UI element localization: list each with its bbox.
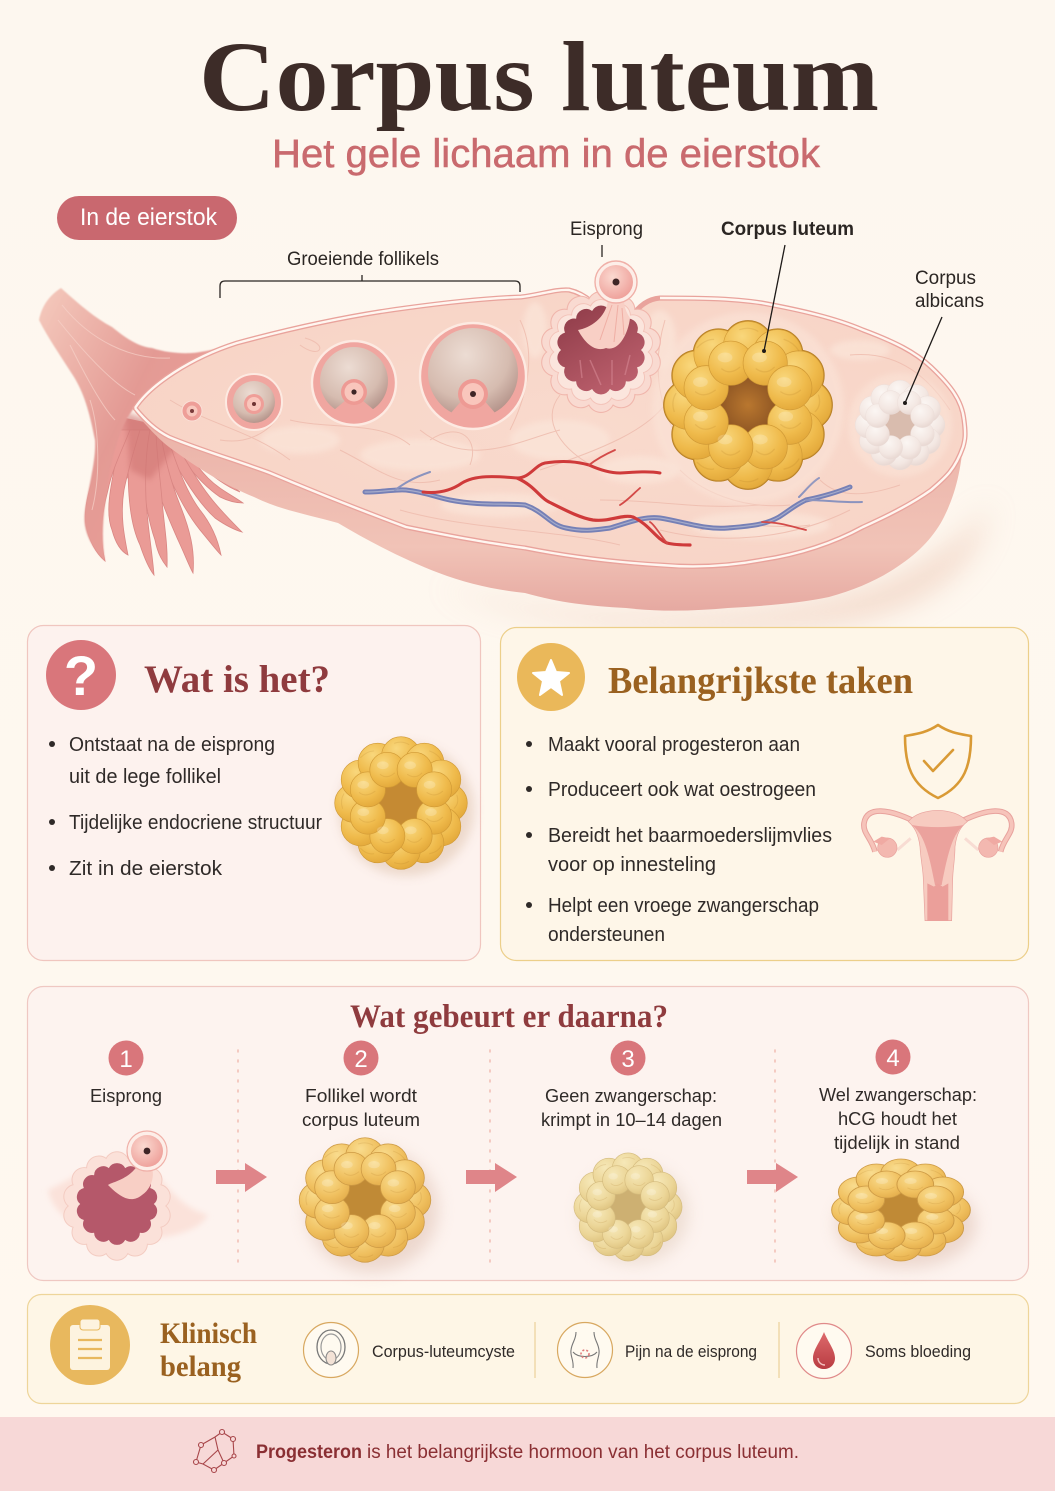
follicle 1 — [182, 401, 202, 421]
bullet list: wat is het: Tijdelijke endocriene structuur — [69, 812, 322, 834]
label: eisprong — [570, 219, 643, 257]
step 1: eisprong: 1 — [119, 1046, 133, 1073]
panel: wat is het — [28, 626, 480, 960]
badge: in de eierstok — [57, 196, 237, 240]
step 1: eisprong: Eisprong — [90, 1086, 162, 1106]
illustration: ovary cross-section — [39, 261, 990, 631]
icon: question mark: ? — [64, 644, 98, 707]
follicle 3 — [312, 341, 396, 425]
bullet list: wat is het — [49, 734, 322, 880]
step 4: wel zwangerschap: Wel zwangerschap: — [819, 1085, 977, 1105]
heading: klinisch belang: Klinisch — [160, 1317, 257, 1350]
footer text: is het belangrijkste hormoon van het corpus luteum. — [367, 1442, 799, 1463]
icon: star — [517, 643, 585, 711]
label: corpus albicans — [903, 268, 984, 405]
bullet list: wat is het: Ontstaat na de eisprong — [69, 734, 275, 756]
heading: klinisch belang: belang — [160, 1350, 241, 1383]
ground shadow — [440, 500, 990, 631]
step 2: follikel wordt corpus luteum: 2 — [354, 1046, 368, 1073]
badge: in de eierstok: In de eierstok — [80, 204, 218, 231]
bullet list: taken: Produceert ook wat oestrogeen — [548, 779, 816, 801]
follicle 2 — [226, 374, 282, 430]
fimbriae root — [112, 415, 172, 480]
label: corpus luteum: Corpus luteum — [721, 219, 854, 240]
fimbriae root shading — [125, 412, 178, 480]
step 3: geen zwangerschap: 3 — [621, 1046, 635, 1073]
panel: klinisch belang — [28, 1294, 1028, 1404]
item: soms bloeding — [796, 1324, 971, 1378]
footer text: Progesteron — [256, 1442, 362, 1463]
arrow 3 — [747, 1163, 798, 1192]
dotted dividers — [238, 1050, 775, 1268]
step 3: geen zwangerschap — [541, 1040, 722, 1264]
step 1: eisprong — [48, 1040, 208, 1260]
heading: belangrijkste taken: Belangrijkste taken — [608, 660, 913, 702]
follicle 4 — [420, 323, 526, 429]
icon: shield with check — [905, 725, 971, 798]
fimbriae — [85, 420, 243, 575]
icon: clipboard — [50, 1305, 130, 1385]
label: corpus albicans: albicans — [915, 291, 984, 312]
step 2: follikel wordt corpus luteum: corpus luteum — [302, 1110, 420, 1130]
blood vessels — [365, 450, 862, 545]
footer band — [0, 1417, 1055, 1491]
cut face — [135, 290, 965, 566]
corpus luteum — [664, 321, 832, 489]
bullet list: taken: Helpt een vroege zwangerschap — [548, 895, 819, 917]
corpus albicans halo — [848, 373, 952, 477]
label: corpus luteum — [721, 219, 854, 353]
step 3: geen zwangerschap: krimpt in 10–14 dagen — [541, 1110, 722, 1130]
item: pijn na de eisprong — [558, 1322, 757, 1378]
label: groeiende follikels: Groeiende follikels — [287, 249, 439, 270]
item: corpus-luteumcyste: Corpus-luteumcyste — [372, 1342, 515, 1361]
arrow 1 — [216, 1163, 267, 1192]
bullet list: taken: voor op innesteling — [548, 854, 716, 876]
step 2: follikel wordt corpus luteum — [299, 1040, 438, 1272]
outer ovary wall — [135, 400, 964, 611]
step 3: geen zwangerschap: Geen zwangerschap: — [545, 1086, 717, 1106]
dividers — [535, 1322, 779, 1378]
label: eisprong: Eisprong — [570, 219, 643, 240]
bullet list: taken — [526, 734, 832, 946]
step 2: follikel wordt corpus luteum: Follikel wordt — [305, 1086, 417, 1106]
tissue texture — [260, 302, 890, 539]
label: corpus albicans: Corpus — [915, 268, 976, 289]
icon: progesterone molecule — [194, 1430, 236, 1472]
step 4: wel zwangerschap — [819, 1040, 977, 1268]
item: pijn na de eisprong: Pijn na de eisprong — [625, 1342, 757, 1361]
illustration: uterus — [864, 810, 1012, 921]
item: corpus-luteumcyste — [304, 1322, 515, 1378]
bullet list: taken: Maakt vooral progesteron aan — [548, 734, 800, 756]
step 4: wel zwangerschap: 4 — [886, 1045, 900, 1072]
ruptured follicle — [542, 261, 660, 412]
heading: wat is het: Wat is het? — [144, 658, 330, 701]
step 4: wel zwangerschap: tijdelijk in stand — [834, 1133, 960, 1153]
subtitle: Het gele lichaam in de eierstok — [272, 132, 821, 176]
title: Corpus luteum — [199, 21, 879, 132]
heading: klinisch belang — [160, 1317, 257, 1383]
corpus luteum halo — [652, 312, 844, 504]
icon: question mark — [46, 640, 116, 710]
bullet list: wat is het: Zit in de eierstok — [69, 858, 223, 880]
ligament — [39, 288, 237, 561]
bullet list: wat is het: uit de lege follikel — [69, 766, 221, 788]
item: soms bloeding: Soms bloeding — [865, 1342, 971, 1361]
step 4: wel zwangerschap: hCG houdt het — [838, 1109, 957, 1129]
bullet list: taken: ondersteunen — [548, 924, 665, 946]
illustration: corpus luteum — [335, 737, 474, 876]
label: groeiende follikels — [220, 249, 520, 298]
arrow 2 — [466, 1163, 517, 1192]
bullet list: taken: Bereidt het baarmoederslijmvlies — [548, 825, 832, 847]
panel: wat gebeurt er daarna — [28, 986, 1028, 1280]
panel: belangrijkste taken — [500, 628, 1028, 960]
corpus albicans — [855, 380, 945, 470]
heading: wat gebeurt er daarna: Wat gebeurt er daarna? — [350, 999, 668, 1035]
